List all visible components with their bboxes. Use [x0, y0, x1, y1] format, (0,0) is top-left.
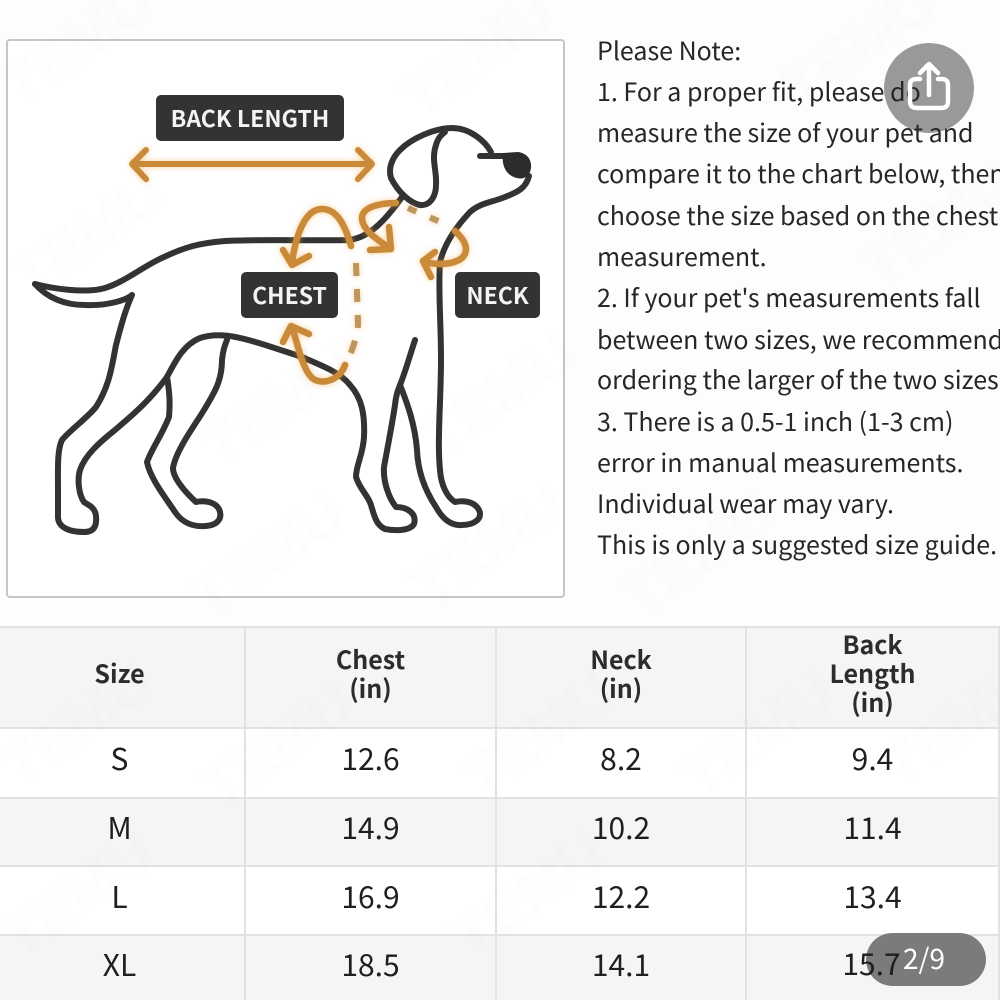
watermark: TEMU: TEMU	[409, 318, 587, 471]
orange measuring arrows	[132, 150, 466, 382]
text block: please note: error in manual measurements.	[597, 444, 963, 480]
row: S: 12.6	[341, 735, 400, 779]
watermark: TEMU: TEMU	[449, 658, 627, 811]
row: S: S	[111, 735, 128, 779]
table cell value: 15.7: 15.7	[842, 940, 901, 984]
row: M	[0, 799, 1000, 867]
text block: please note: 1. For a proper fit, please do	[597, 73, 921, 109]
table header row: Chest	[336, 640, 405, 676]
page counter text: 2/9	[903, 938, 945, 978]
text block: please note: ordering the larger of the two sizes.	[597, 361, 1000, 397]
watermark: TEMU: TEMU	[189, 668, 367, 821]
row: M: M	[107, 804, 132, 848]
text block: please note: compare it to the chart below, then	[597, 155, 1000, 191]
label: back length	[156, 95, 344, 141]
text block: please note: measurement.	[597, 238, 767, 274]
row: XL	[103, 936, 1000, 1000]
row: XL: XL	[103, 941, 136, 985]
panel: measuring diagram	[6, 39, 565, 598]
text block: please note: between two sizes, we recommend	[597, 321, 1000, 357]
row: L: 13.4	[843, 872, 902, 916]
row: S: 8.2	[600, 735, 642, 779]
table header row: Back	[842, 626, 903, 662]
table header row: (in)	[600, 670, 642, 706]
label: back length: BACK LENGTH	[171, 100, 329, 134]
row: L: 16.9	[341, 872, 400, 916]
row: S: 9.4	[852, 735, 893, 779]
watermark: TEMU: TEMU	[189, 328, 367, 481]
text block: please note	[597, 32, 1000, 562]
label: chest: CHEST	[252, 277, 327, 311]
row: XL: 14.1	[592, 941, 650, 985]
row: M: 14.9	[341, 804, 400, 848]
table header row: Length	[829, 655, 916, 691]
row: M: 11.4	[843, 804, 902, 848]
text block: please note: 2. If your pet's measurements fall	[597, 279, 981, 315]
row: L: L	[111, 872, 128, 916]
icon: dog nose	[503, 152, 531, 179]
table header row: (in)	[349, 670, 392, 706]
table header row	[0, 626, 1000, 729]
row: M: 10.2	[592, 804, 650, 848]
text block: please note: This is only a suggested size guide.	[597, 526, 997, 562]
label: chest	[241, 272, 338, 318]
row: L	[0, 867, 1000, 936]
label: neck: NECK	[466, 277, 529, 311]
watermark: TEMU: TEMU	[609, 478, 787, 631]
size table	[0, 626, 1000, 1000]
watermark: TEMU: TEMU	[179, 478, 357, 631]
text block: please note: 3. There is a 0.5-1 inch (1-3 cm)	[597, 403, 953, 439]
text block: please note: Please Note:	[597, 32, 741, 68]
watermark: TEMU: TEMU	[0, 158, 177, 311]
table header row: Size	[94, 655, 145, 691]
text block: please note: Individual wear may vary.	[597, 485, 894, 521]
row: L: 12.2	[592, 872, 650, 916]
share button background	[884, 43, 974, 133]
watermark: TEMU: TEMU	[439, 818, 617, 971]
text block: please note: measure the size of your pet and	[597, 114, 973, 150]
page counter badge background	[866, 933, 986, 986]
watermark: TEMU: TEMU	[669, 658, 847, 811]
row: S	[0, 729, 1000, 799]
table header row: (in)	[851, 684, 894, 720]
table header row: Neck	[590, 640, 652, 676]
text block: please note: choose the size based on the chest	[597, 197, 998, 233]
icon: share arrow	[908, 62, 950, 110]
dog outline illustration	[32, 125, 532, 535]
label: neck	[455, 272, 540, 318]
watermark: TEMU: TEMU	[399, 468, 577, 621]
row: XL: 18.5	[341, 941, 400, 985]
